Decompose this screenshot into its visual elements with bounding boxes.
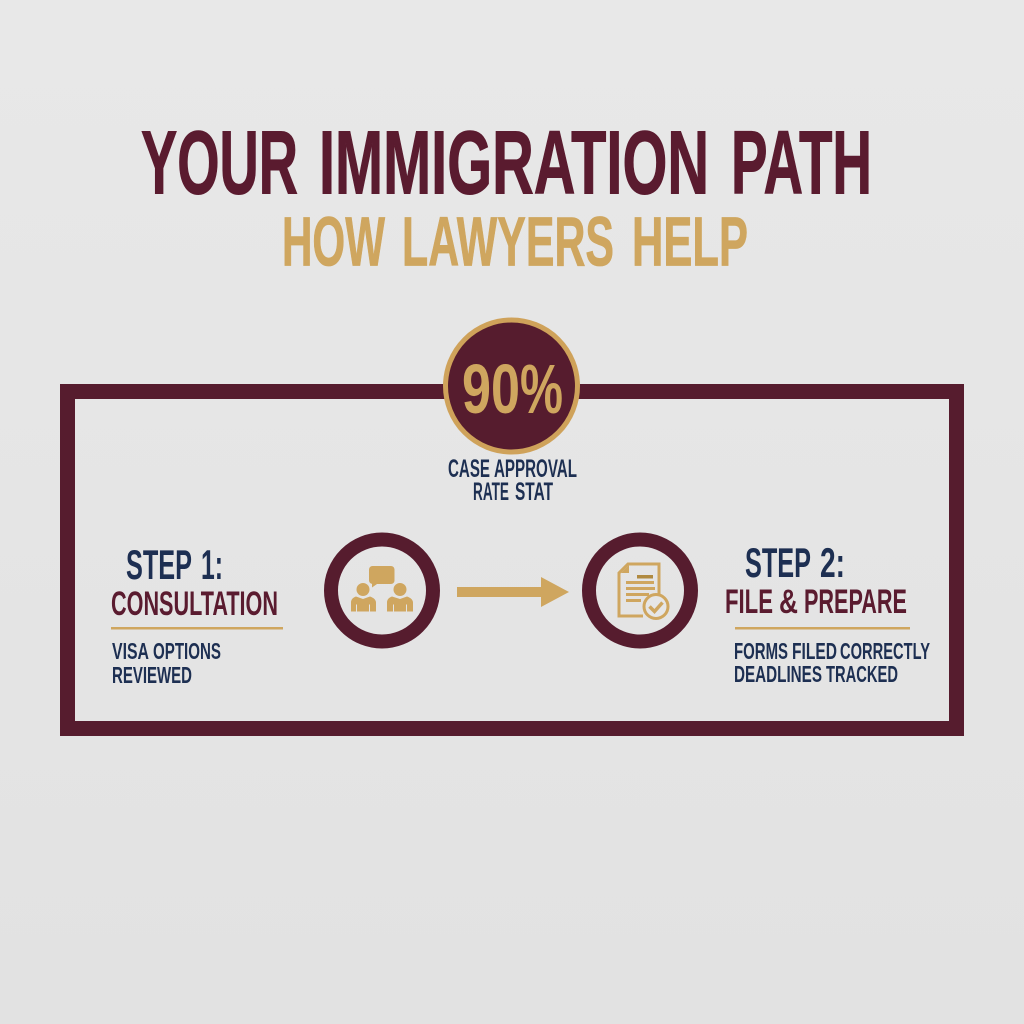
stat badge: 90%: 90	[462, 350, 520, 428]
step 1 label: STEP	[126, 541, 192, 588]
step 1 description: OPTIONS	[153, 638, 221, 664]
step 2 description: CORRECTLY	[840, 638, 930, 664]
speech bubble	[369, 566, 394, 588]
stat caption: APPROVAL	[494, 455, 577, 483]
subtitle: HOW	[282, 202, 385, 280]
stat caption: CASE	[448, 455, 490, 483]
person right	[387, 583, 413, 612]
stat caption: RATE	[473, 478, 509, 506]
step 2 label: 2:	[820, 539, 845, 586]
step 1 description: REVIEWED	[112, 662, 192, 688]
folded corner	[621, 565, 629, 573]
step 2 description: DEADLINES	[734, 661, 822, 687]
step 2 heading: FILE	[725, 583, 773, 621]
step 2 heading: PREPARE	[804, 583, 907, 621]
step 1 description	[112, 638, 221, 688]
check badge	[644, 594, 668, 618]
arrow	[457, 577, 569, 607]
step 1 description: VISA	[112, 638, 149, 664]
step 2 description: TRACKED	[826, 661, 898, 687]
stat badge: 90%: %	[520, 350, 563, 428]
person left	[351, 583, 376, 612]
step 2 heading	[725, 583, 907, 621]
stat badge: 90%	[446, 320, 578, 452]
document lines	[626, 575, 655, 602]
step 1 heading: CONSULTATION	[111, 585, 278, 623]
title: PATH	[731, 114, 872, 214]
document	[619, 564, 659, 616]
title: IMMIGRATION	[319, 114, 709, 214]
subtitle: HELP	[632, 202, 748, 280]
step 1 label: 1:	[201, 541, 223, 588]
panel: step 2 text	[725, 539, 930, 687]
step 2 heading: &	[779, 583, 798, 621]
icon: document check	[589, 540, 691, 642]
step 2 description	[734, 638, 930, 687]
stat caption: STAT	[515, 478, 553, 506]
step 2 description: FORMS	[734, 638, 788, 664]
title: YOUR	[141, 114, 298, 214]
step 2 description: FILED	[792, 638, 837, 664]
stat caption	[448, 455, 577, 506]
panel: step 1 text	[111, 541, 283, 688]
step 2 label: STEP	[745, 539, 811, 586]
subtitle: LAWYERS	[402, 202, 614, 280]
icon: consultation	[331, 540, 433, 642]
panel: process frame	[68, 392, 956, 728]
